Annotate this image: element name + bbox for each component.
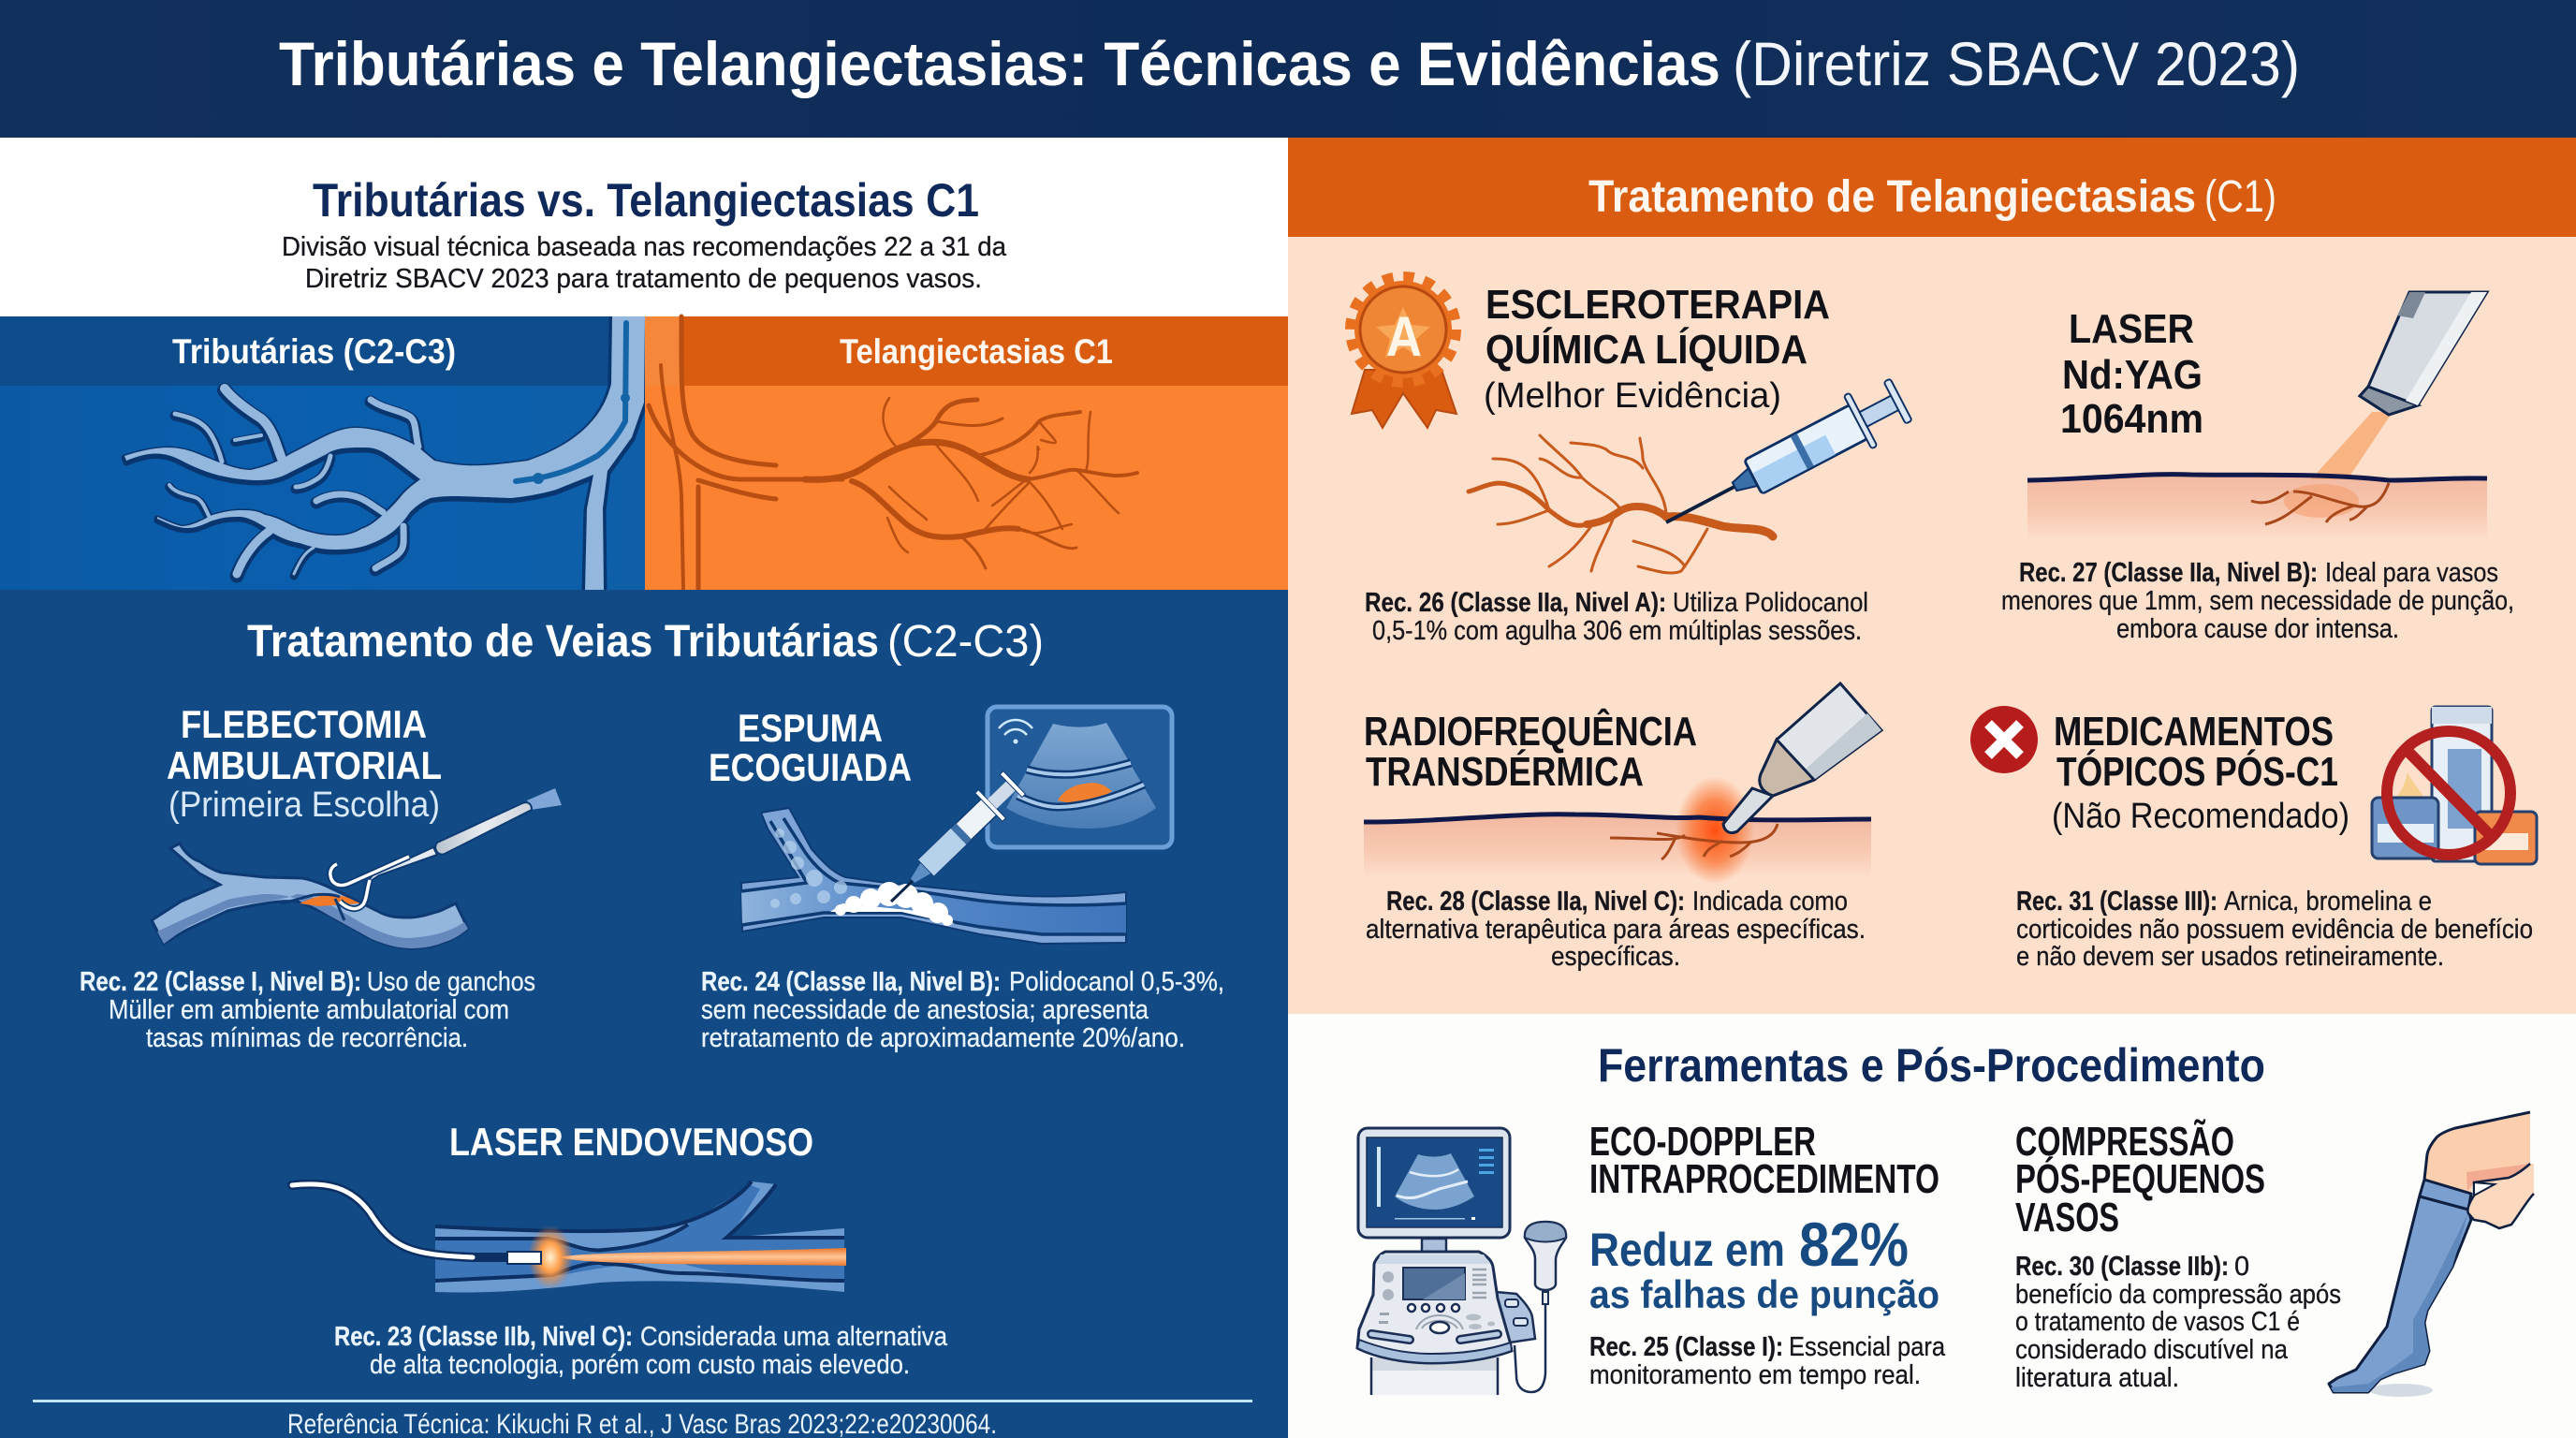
text: rec 30: 0 bbox=[2234, 1252, 2249, 1282]
text: rec 28: Indicada como bbox=[1692, 887, 1848, 917]
panel: telangiectasia treatment bbox=[1288, 138, 2576, 1014]
section heading: Tratamento de Telangiectasias bbox=[1588, 172, 2196, 222]
text: rec 23: de alta tecnologia, porém com custo mais elevedo. bbox=[370, 1350, 910, 1380]
heading: compression: VASOS bbox=[2015, 1195, 2119, 1240]
illustration: telangiectasia network bbox=[649, 316, 1137, 590]
label: tributaries: Tributárias (C2-C3) bbox=[172, 332, 456, 371]
illustration: endovenous laser bbox=[292, 1181, 846, 1293]
panel: tools and post-procedure bbox=[1288, 1014, 2576, 1438]
text: rec 27: Ideal para vasos bbox=[2325, 558, 2498, 588]
illustration: RF probe on skin bbox=[1364, 683, 1881, 885]
heading: topical medications bbox=[2052, 709, 2349, 836]
panel: tributary vein treatment bbox=[0, 590, 1288, 1438]
text: rec 24 bbox=[701, 967, 1224, 1053]
text: rec 30: benefício da compressão após bbox=[2015, 1280, 2341, 1310]
text: rec 30: considerado discutível na bbox=[2015, 1335, 2289, 1365]
text: rec 24: retratamento de aproximadamente 20%/ano. bbox=[701, 1023, 1185, 1053]
heading: flebectomia: AMBULATORIAL bbox=[167, 743, 442, 787]
text: rec 28: Rec. 28 (Classe IIa, Nivel C): bbox=[1386, 887, 1685, 917]
illustration: foam in vein bbox=[741, 769, 1126, 944]
text: rec 31: e não devem ser usados retineiramente. bbox=[2016, 942, 2444, 972]
text: rec 31: Arnica, bromelina e bbox=[2224, 887, 2432, 917]
stat: 82 percent bbox=[1589, 1210, 1939, 1316]
text: rec 30: Rec. 30 (Classe IIb): bbox=[2015, 1252, 2229, 1282]
heading: flebectomia: FLEBECTOMIA bbox=[181, 702, 427, 746]
text: rec 27 bbox=[2001, 558, 2514, 644]
icon: evidence A badge: A bbox=[1386, 305, 1422, 368]
heading: laser Nd:YAG: Nd:YAG bbox=[2062, 352, 2203, 398]
text: rec 31: Rec. 31 (Classe III): bbox=[2016, 887, 2217, 917]
text: rec 25: Essencial para bbox=[1789, 1332, 1946, 1362]
heading: radiofrequencia: RADIOFREQUÊNCIA bbox=[1364, 708, 1697, 755]
title: Tributárias e Telangiectasias: Técnicas e Evidências bbox=[279, 29, 1720, 98]
heading: eco-doppler bbox=[1589, 1119, 1939, 1202]
text: rec 22 bbox=[80, 967, 535, 1053]
heading: topical medications: (Não Recomendado) bbox=[2052, 797, 2349, 836]
text: rec 28 bbox=[1366, 887, 1866, 972]
text: rec 22: Uso de ganchos bbox=[367, 967, 535, 997]
panel: intro comparison bbox=[0, 138, 1288, 316]
text: rec 30: o tratamento de vasos C1 é bbox=[2015, 1307, 2300, 1337]
heading: flebectomia: (Primeira Escolha) bbox=[168, 785, 440, 825]
text: rec 22: Rec. 22 (Classe I, Nivel B): bbox=[80, 967, 361, 997]
text: rec 30 bbox=[2015, 1252, 2341, 1393]
heading: escleroterapia bbox=[1484, 282, 1830, 416]
text: rec 26: Rec. 26 (Classe IIa, Nivel A): bbox=[1365, 588, 1666, 618]
text: rec 27: Rec. 27 (Classe IIa, Nivel B): bbox=[2019, 558, 2318, 588]
title: (Diretriz SBACV 2023) bbox=[1733, 29, 2300, 98]
comparison subtitle: Diretriz SBACV 2023 para tratamento de pequenos vasos. bbox=[305, 264, 982, 294]
heading: topical medications: MEDICAMENTOS bbox=[2054, 709, 2334, 755]
heading: escleroterapia: ESCLEROTERAPIA bbox=[1486, 282, 1830, 328]
text: rec 31 bbox=[2016, 887, 2533, 972]
section heading: Tratamento de Veias Tributárias bbox=[247, 617, 879, 667]
heading: escleroterapia: (Melhor Evidência) bbox=[1484, 376, 1781, 416]
heading: eco-doppler: ECO-DOPPLER bbox=[1589, 1119, 1816, 1165]
text: rec 22: Müller em ambiente ambulatorial com bbox=[109, 995, 509, 1025]
text: rec 26: Utiliza Polidocanol bbox=[1673, 588, 1868, 618]
section heading: (C1) bbox=[2204, 172, 2276, 222]
stat: 82 percent: as falhas de punção bbox=[1589, 1272, 1939, 1316]
heading: laser Nd:YAG: LASER bbox=[2069, 306, 2194, 352]
text: rec 26: 0,5-1% com agulha 306 em múltiplas sessões. bbox=[1372, 616, 1862, 646]
text: rec 23: Rec. 23 (Classe IIb, Nivel C): bbox=[334, 1322, 633, 1352]
illustration: compression stocking leg bbox=[2329, 1112, 2534, 1397]
heading: radiofrequencia: TRANSDÉRMICA bbox=[1366, 748, 1644, 795]
heading: compression: PÓS-PEQUENOS bbox=[2015, 1155, 2265, 1202]
illustration: tributary veins bbox=[124, 316, 645, 592]
header band bbox=[0, 0, 2576, 138]
label: telangiectasias: Telangiectasias C1 bbox=[840, 332, 1113, 371]
heading: topical medications: TÓPICOS PÓS-C1 bbox=[2056, 748, 2338, 795]
icon: syringe bbox=[877, 769, 1028, 916]
illustration: vein network and syringe bbox=[1469, 373, 1915, 573]
text: rec 24: sem necessidade de anestosia; apresenta bbox=[701, 995, 1149, 1025]
stat: 82 percent: 82% bbox=[1799, 1210, 1909, 1279]
heading: espuma: ECOGUIADA bbox=[709, 745, 912, 789]
text: rec 28: alternativa terapêutica para áreas específicas. bbox=[1366, 915, 1866, 945]
heading: laser endovenoso: LASER ENDOVENOSO bbox=[449, 1120, 813, 1164]
icon: evidence A badge bbox=[1352, 278, 1456, 428]
comparison heading: Tributárias vs. Telangiectasias C1 bbox=[313, 174, 979, 227]
text: rec 30: literatura atual. bbox=[2015, 1363, 2179, 1393]
icon: red X bbox=[1970, 706, 2038, 773]
heading: radiofrequencia bbox=[1364, 708, 1697, 795]
heading: escleroterapia: QUÍMICA LÍQUIDA bbox=[1486, 326, 1808, 373]
text: rec 23 bbox=[334, 1322, 948, 1380]
comparison subtitle bbox=[282, 232, 1007, 294]
text: rec 23: Considerada uma alternativa bbox=[640, 1322, 948, 1352]
section heading: Ferramentas e Pós-Procedimento bbox=[1598, 1039, 2265, 1092]
illustration: ultrasound inset bbox=[988, 707, 1172, 847]
text: rec 28: específicas. bbox=[1551, 942, 1680, 972]
panel: tributaries vs telangiectasias band bbox=[0, 316, 1288, 592]
heading: espuma bbox=[709, 706, 912, 789]
heading: compression bbox=[2015, 1118, 2265, 1240]
illustration: phlebectomy hook bbox=[152, 788, 562, 948]
heading: flebectomia bbox=[167, 702, 442, 825]
text: rec 24: Polidocanol 0,5-3%, bbox=[1009, 967, 1224, 997]
heading: eco-doppler: INTRAPROCEDIMENTO bbox=[1589, 1156, 1939, 1202]
text: rec 25: monitoramento em tempo real. bbox=[1589, 1360, 1921, 1390]
stat: 82 percent: Reduz em bbox=[1589, 1224, 1785, 1276]
heading: laser Nd:YAG bbox=[2060, 306, 2203, 442]
text: rec 25: Rec. 25 (Classe I): bbox=[1589, 1332, 1783, 1362]
icon: topical products crossed out bbox=[2372, 707, 2537, 864]
heading: espuma: ESPUMA bbox=[738, 706, 883, 750]
text: rec 24: Rec. 24 (Classe IIa, Nivel B): bbox=[701, 967, 1001, 997]
illustration: Nd:YAG handpiece on skin bbox=[2027, 292, 2487, 540]
text: rec 22: tasas mínimas de recorrência. bbox=[146, 1023, 468, 1053]
text: rec 27: embora cause dor intensa. bbox=[2116, 614, 2399, 644]
text: rec 25 bbox=[1589, 1332, 1946, 1390]
section heading: (C2-C3) bbox=[887, 617, 1044, 667]
text: rec 26 bbox=[1365, 588, 1868, 646]
heading: laser Nd:YAG: 1064nm bbox=[2060, 396, 2203, 442]
illustration: ultrasound machine bbox=[1357, 1128, 1566, 1395]
heading: compression: COMPRESSÃO bbox=[2015, 1118, 2234, 1165]
comparison subtitle: Divisão visual técnica baseada nas recomendações 22 a 31 da bbox=[282, 232, 1007, 262]
